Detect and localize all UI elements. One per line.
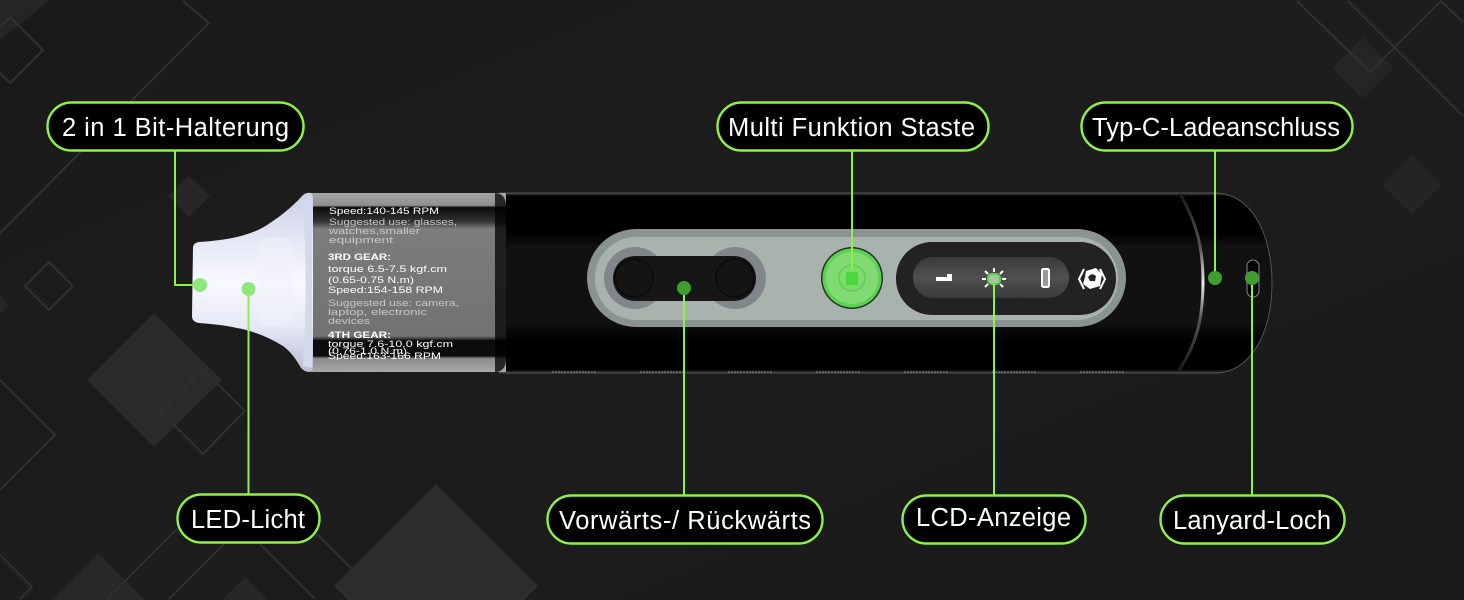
callout: Vorwärts-/ Rückwärts: Vorwärts-/ Rückwärts <box>559 507 811 535</box>
transparent window with gear table: (0.65-0.75 N.m) <box>328 275 414 286</box>
transparent window with gear table: devices <box>328 316 370 327</box>
callout: Typ-C-Ladeanschluss <box>1082 102 1352 285</box>
white nose cap <box>192 193 313 372</box>
callout: Lanyard-Loch <box>1160 271 1344 544</box>
callout: LED-Licht <box>178 282 320 542</box>
transparent window with gear table: 4TH GEAR: <box>328 330 391 341</box>
icon: LED light <box>982 268 1006 287</box>
callout: 2 in 1 Bit-Halterung <box>48 102 304 292</box>
green multifunction button <box>821 247 883 309</box>
transparent window with gear table: torque 6.5-7.5 kgf.cm <box>328 264 447 275</box>
callout: 2 in 1 Bit-Halterung: 2 in 1 Bit-Halterung <box>62 114 289 142</box>
callout: Typ-C-Ladeanschluss: Typ-C-Ladeanschluss <box>1092 114 1340 142</box>
transparent window with gear table: Speed:154-158 RPM <box>328 285 443 296</box>
handle body <box>500 193 1272 373</box>
icon: gear level <box>936 274 952 281</box>
vent marks along lower edge <box>552 371 1124 373</box>
transparent window with gear table: (0.76-1.0 N.m) <box>328 346 407 357</box>
transparent window with gear table: torque 7.6-10.0 kgf.cm <box>328 339 453 350</box>
callout: Multi Funktion Staste <box>718 102 988 270</box>
callout: LCD-Anzeige <box>902 284 1086 544</box>
LCD panel <box>896 242 1116 315</box>
transparent window with gear table: Speed:163-166 RPM <box>328 351 441 362</box>
icon: battery <box>1042 269 1049 287</box>
device: electric screwdriver <box>192 193 1272 373</box>
callout: LCD-Anzeige: LCD-Anzeige <box>916 504 1071 532</box>
transparent window with gear table: equipment <box>329 235 394 246</box>
callout: LED-Licht: LED-Licht <box>191 506 305 534</box>
transparent window with gear table: Suggested use: camera, <box>328 298 459 309</box>
lanyard hole <box>1247 260 1259 297</box>
slider switch <box>604 247 766 309</box>
control panel <box>587 229 1126 327</box>
metal ring <box>1178 194 1203 372</box>
transparent window with gear table: watches,smaller <box>328 226 420 237</box>
callout: Multi Funktion Staste: Multi Funktion Staste <box>728 114 975 142</box>
transparent window with gear table: Speed:140-145 RPM <box>329 206 439 217</box>
callout: Vorwärts-/ Rückwärts <box>548 281 822 544</box>
transparent window with gear table: 3RD GEAR: <box>328 252 391 263</box>
transparent window with gear table: laptop, electronic <box>328 307 427 318</box>
icon: brand logo <box>1079 268 1105 289</box>
callout: Lanyard-Loch: Lanyard-Loch <box>1173 507 1331 535</box>
transparent window with gear table: Suggested use: glasses, <box>329 217 457 228</box>
transparent window with gear table <box>311 193 506 372</box>
